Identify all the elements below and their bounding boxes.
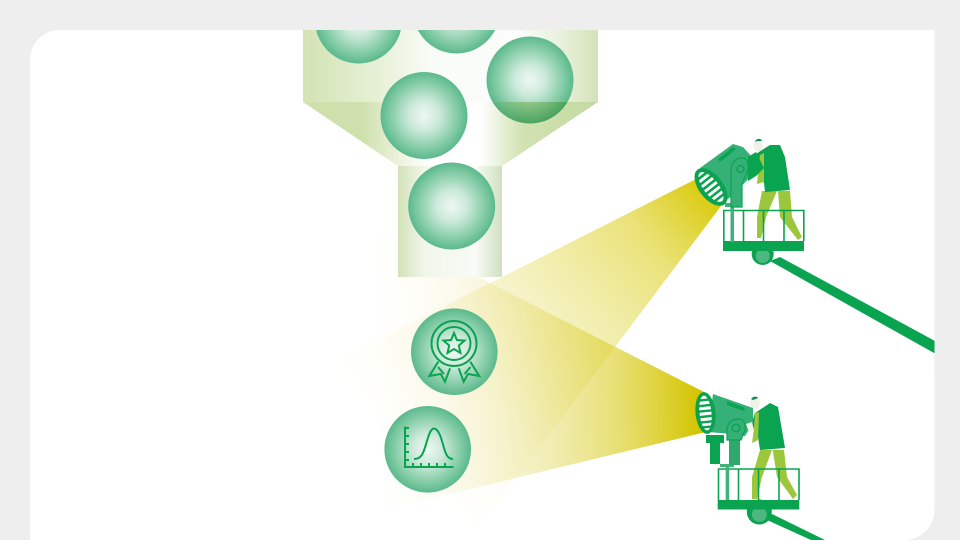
scarf [757, 153, 764, 184]
sphere middle [380, 72, 468, 159]
icon: award [429, 321, 479, 382]
head [750, 397, 760, 409]
lens [688, 162, 734, 212]
badge circle [411, 308, 498, 395]
lamp body [700, 144, 753, 203]
sphere top centre [418, 30, 496, 54]
distribution chart badge [384, 406, 471, 493]
lamp body [708, 394, 753, 436]
platform rails [718, 469, 799, 500]
lamp top detail [718, 147, 736, 162]
pole [730, 205, 734, 242]
badge circle [384, 406, 471, 493]
lift arm [770, 257, 934, 353]
right leg [773, 450, 797, 499]
lamp top detail [727, 401, 745, 411]
left leg [757, 191, 777, 238]
lift arm [767, 514, 825, 540]
lower operator on lift [693, 391, 825, 540]
funnel hopper [303, 102, 598, 166]
funnel spout [398, 166, 502, 277]
hand [748, 152, 764, 181]
base plate [720, 464, 734, 467]
white slot [720, 443, 729, 462]
head [754, 139, 762, 152]
wheel [752, 243, 774, 265]
funnel with spheres [303, 30, 598, 277]
lower beam [375, 230, 706, 512]
sphere top left [316, 30, 401, 64]
sphere right [486, 36, 574, 124]
pole [726, 465, 729, 500]
lamp mount [725, 203, 741, 207]
icon: bell curve chart [405, 426, 454, 467]
upper operator on lift [688, 139, 934, 353]
wheel [747, 500, 772, 524]
coat [750, 403, 785, 450]
lens [693, 391, 718, 435]
right leg [778, 191, 802, 240]
yoke arm [727, 419, 745, 440]
spotlight beams [340, 178, 721, 540]
spotlight [688, 144, 764, 242]
yoke [731, 158, 748, 207]
sphere in spout [408, 162, 495, 250]
funnel upper section [303, 30, 598, 102]
scarf [752, 412, 759, 443]
pivot [737, 166, 744, 172]
upper beam [340, 178, 721, 540]
platform rails [724, 210, 804, 241]
pivot [732, 424, 740, 432]
platform base [718, 500, 799, 510]
coat [751, 145, 790, 192]
yoke lower [729, 432, 740, 465]
hand [746, 422, 754, 432]
platform base [723, 241, 804, 251]
left leg [752, 450, 772, 499]
award badge [411, 308, 498, 395]
spotlight [693, 391, 754, 500]
dark mount block [706, 435, 724, 464]
